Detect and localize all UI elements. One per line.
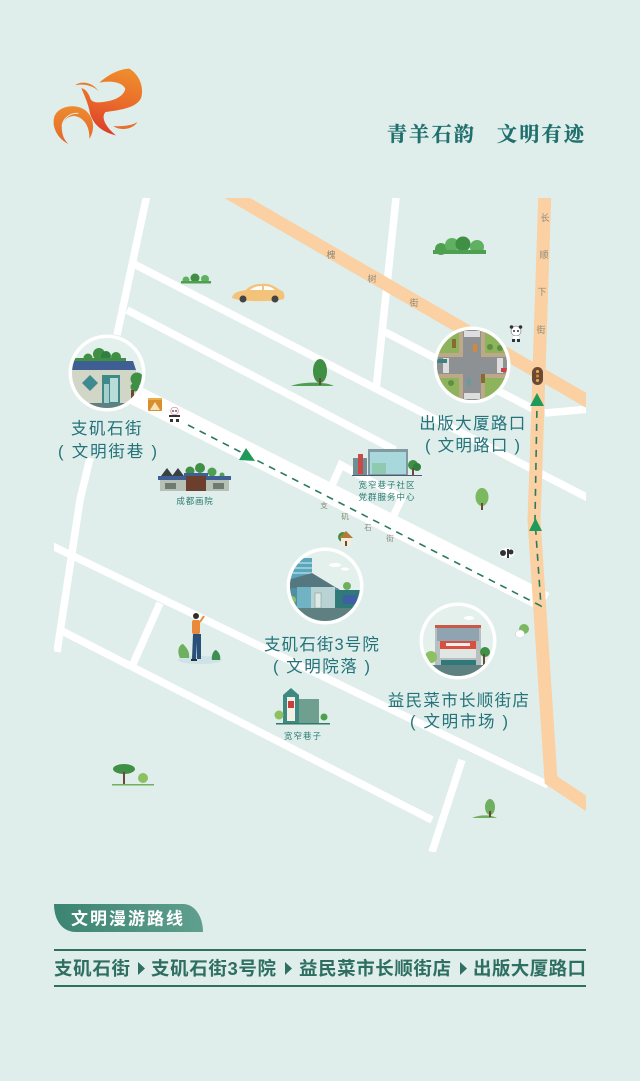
label: 宽窄巷子社区 党群服务中心: 党群服务中心	[358, 492, 416, 502]
label: 出版大厦路口	[419, 414, 527, 455]
road names: 矶	[341, 512, 349, 521]
road names: 街	[536, 324, 546, 335]
icon: tree with hill	[291, 359, 334, 386]
label: 出版大厦路口: ( 文明路口 )	[425, 436, 520, 455]
circle: 支矶石街	[68, 334, 146, 415]
orange roads	[220, 188, 596, 810]
road names: 石	[364, 523, 372, 532]
title	[387, 118, 586, 147]
label: 宽窄巷子社区 党群服务中心	[358, 480, 416, 502]
panda	[510, 325, 522, 342]
circle: 益民菜市长顺街店	[420, 602, 496, 680]
route summary	[54, 949, 586, 987]
white street network	[44, 190, 596, 852]
icon: tree	[476, 488, 488, 510]
circle: 出版大厦路口	[434, 326, 510, 404]
road names: 树	[367, 273, 377, 284]
route summary: 益民菜市长顺街店	[299, 958, 451, 979]
icon: cabbage	[516, 624, 529, 638]
route summary: 支矶石街3号院	[151, 958, 276, 979]
route arrow 2	[529, 518, 542, 531]
label: 支矶石街: 支矶石街	[71, 419, 143, 438]
label: 支矶石街	[58, 419, 157, 461]
route: dashed green line	[188, 404, 541, 606]
figure: person with selfie	[178, 613, 222, 664]
road names: 长	[540, 212, 550, 223]
road names: 下	[537, 287, 547, 297]
circle: 支矶石街3号院	[286, 548, 364, 625]
label: 益民菜市长顺街店: 益民菜市长顺街店	[388, 691, 530, 710]
label: 支矶石街3号院: ( 文明院落 )	[273, 657, 370, 676]
logo: phoenix	[54, 69, 142, 144]
label: 支矶石街3号院	[264, 635, 380, 676]
icon: tree bottom right	[472, 799, 497, 818]
route summary: 支矶石街	[54, 958, 130, 979]
route arrow 3	[530, 393, 544, 406]
label: 成都画院: 成都画院	[176, 496, 214, 506]
building: 宽窄巷子	[274, 688, 330, 724]
road names: 顺	[539, 250, 549, 260]
road names: 支	[320, 500, 328, 510]
panda	[169, 407, 180, 422]
icon: house	[338, 531, 353, 546]
route arrow 1	[239, 448, 255, 461]
label: 益民菜市长顺街店: ( 文明市场 )	[410, 712, 508, 731]
title: 文明有迹	[497, 118, 586, 147]
icon: bush small	[181, 274, 211, 284]
icon: car	[232, 284, 284, 302]
section tag: 文明漫游路线	[71, 908, 185, 928]
icon: trees bottom left	[112, 764, 154, 786]
panda	[499, 548, 515, 558]
label: 宽窄巷子社区 党群服务中心: 宽窄巷子社区	[358, 480, 416, 490]
road names: 街	[386, 533, 394, 543]
title: 青羊石韵	[387, 118, 476, 147]
route summary: 出版大厦路口	[473, 958, 586, 979]
label: 宽窄巷子: 宽窄巷子	[284, 731, 322, 741]
road names: 槐	[326, 249, 336, 260]
building: 宽窄巷子社区	[352, 449, 422, 476]
section tag	[54, 904, 203, 932]
label: 出版大厦路口: 出版大厦路口	[419, 414, 527, 433]
traffic light	[532, 367, 543, 385]
building: 成都画院	[158, 463, 231, 491]
label: 益民菜市长顺街店	[388, 691, 530, 731]
map roads	[44, 188, 596, 852]
label: 支矶石街: ( 文明街巷 )	[58, 442, 157, 461]
photo icon	[148, 398, 162, 411]
icon: bush large	[433, 236, 486, 255]
road names: 街	[409, 297, 419, 308]
label: 支矶石街3号院: 支矶石街3号院	[264, 635, 380, 654]
main street: 支矶石街	[125, 390, 545, 602]
road names	[320, 212, 550, 543]
